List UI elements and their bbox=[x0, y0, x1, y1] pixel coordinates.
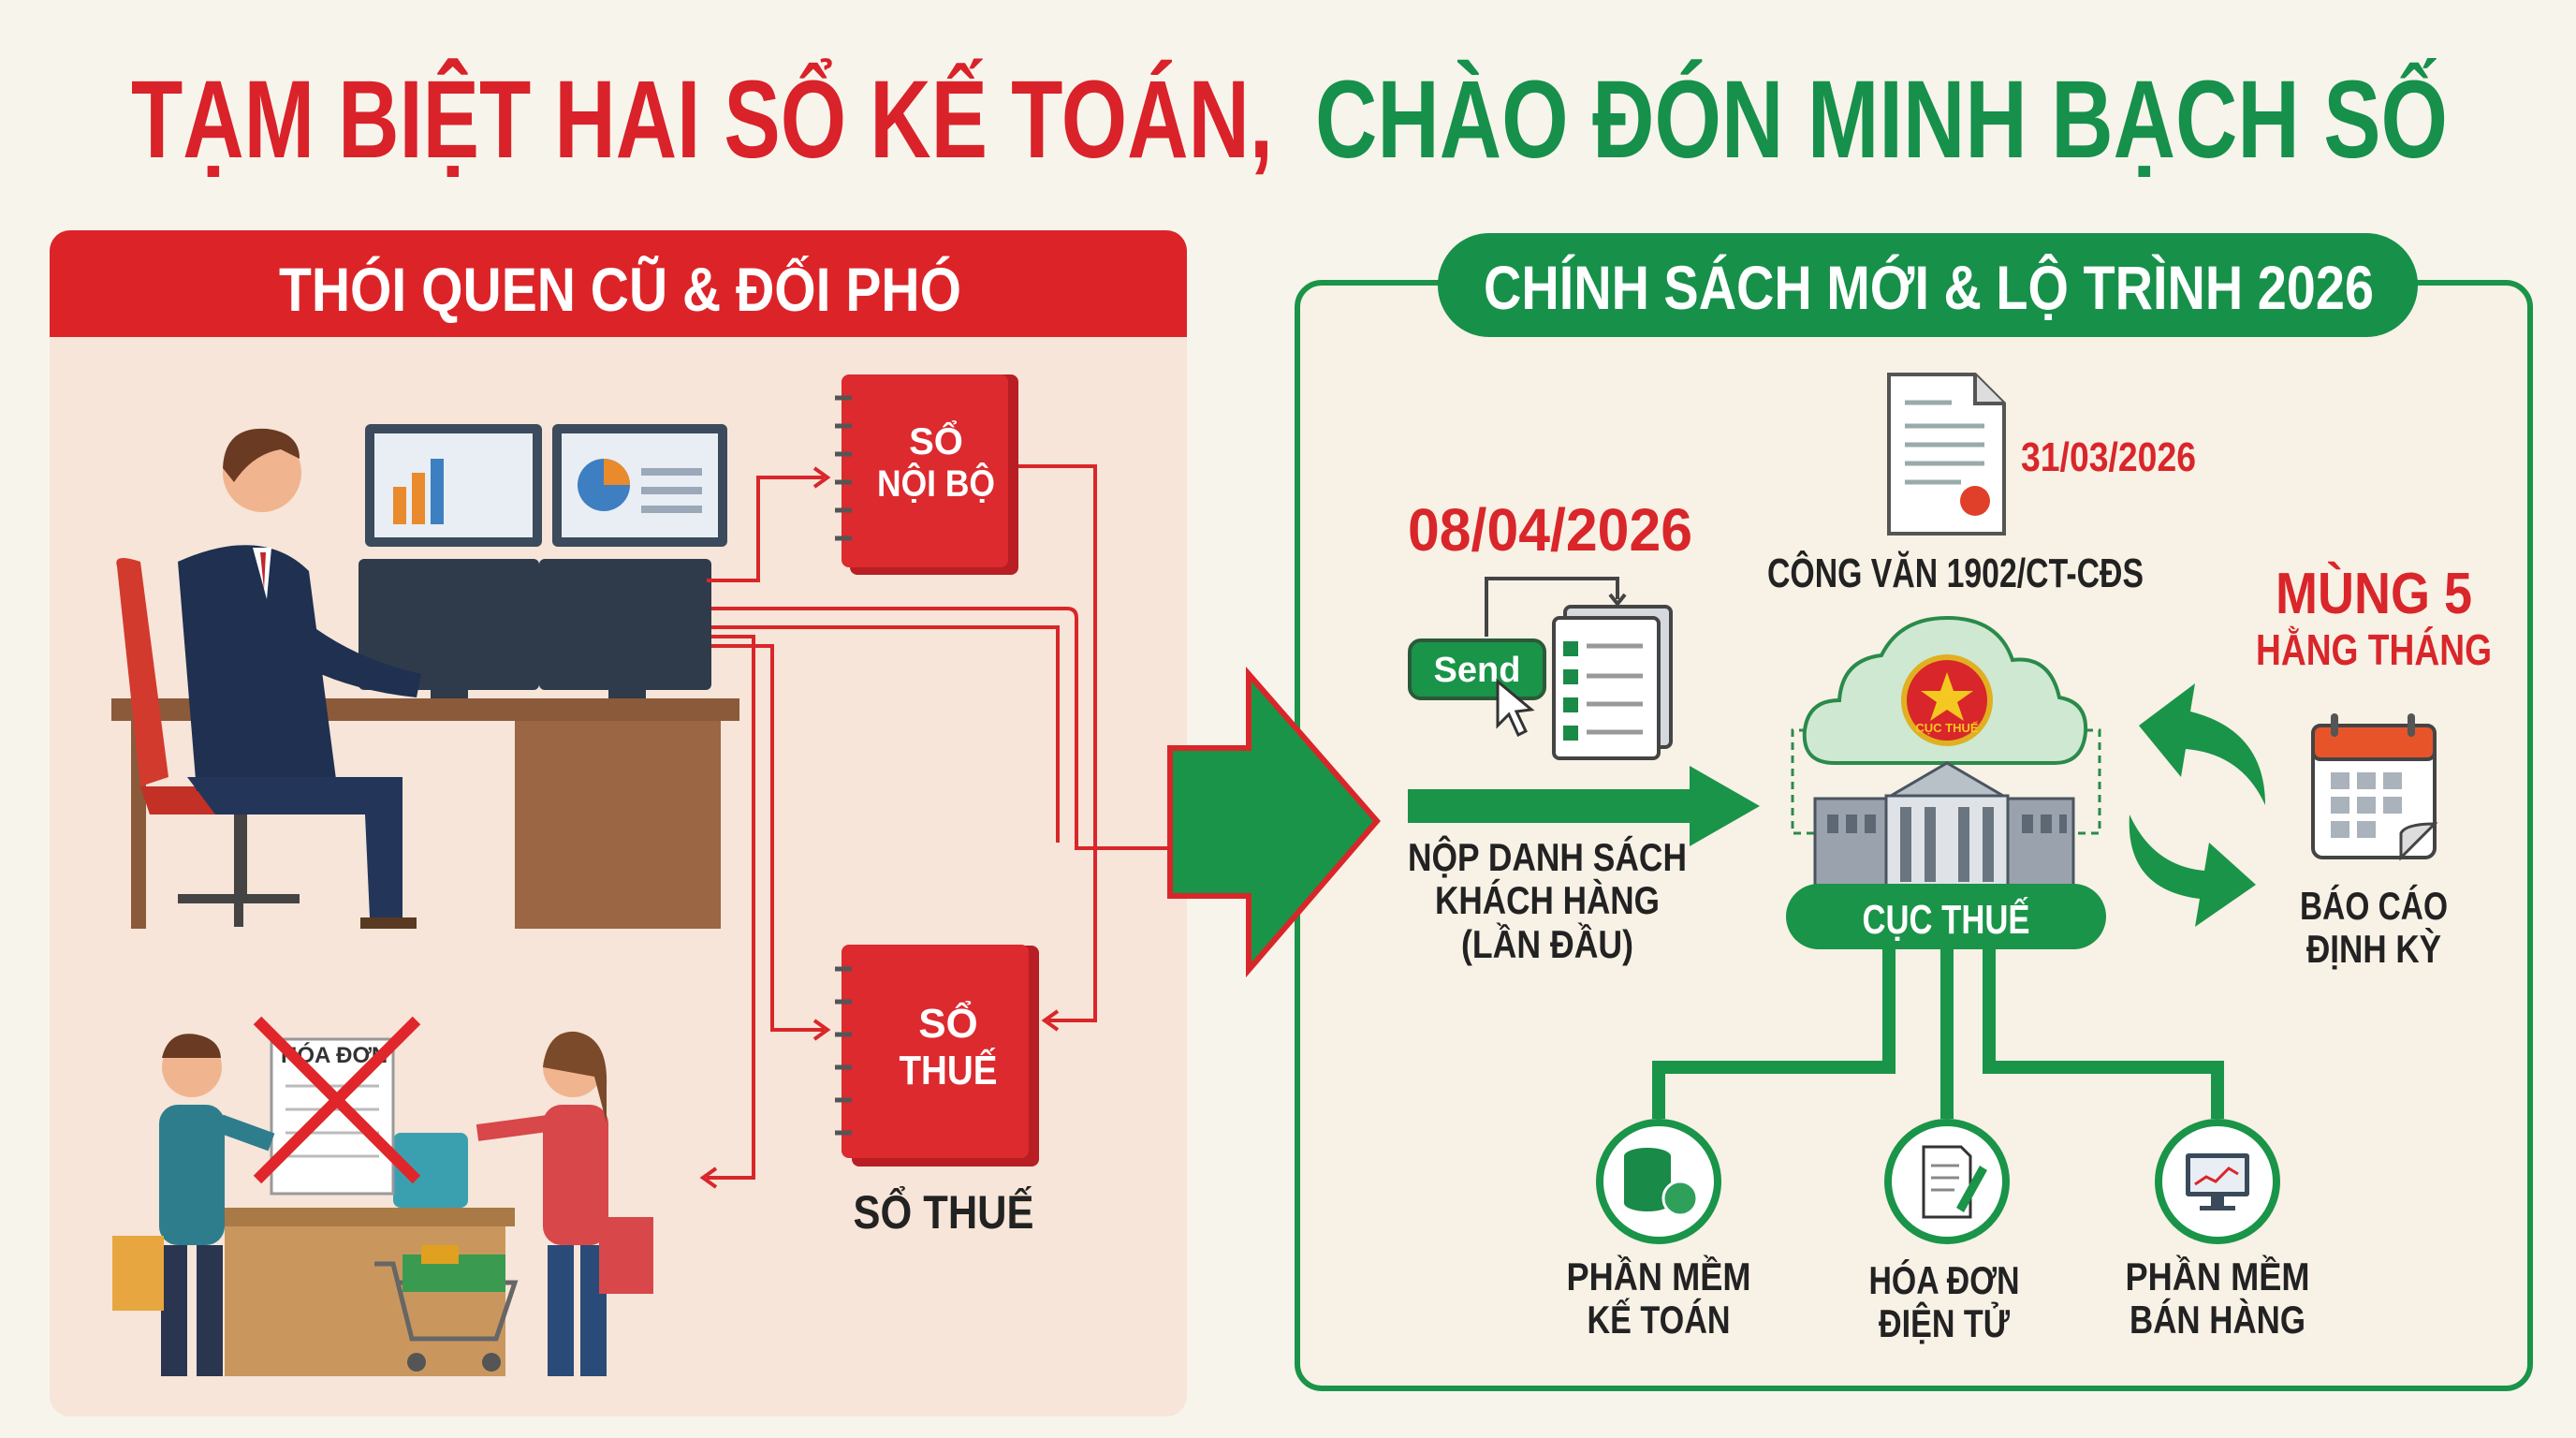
icon: official document bbox=[1889, 374, 2004, 534]
label: CỤC THUẾ pill: CỤC THUẾ bbox=[1863, 896, 2029, 943]
text: submit customer list: (LẦN ĐẦU) bbox=[1461, 922, 1633, 966]
label: SỔ THUẾ: SỔ THUẾ bbox=[854, 1185, 1033, 1239]
notebook: SỔ THUẾ: SỔ bbox=[918, 999, 978, 1047]
text: monthly deadline bbox=[2256, 562, 2492, 674]
icon: send list bbox=[1410, 579, 1671, 758]
labels: integrations: BÁN HÀNG bbox=[2130, 1298, 2305, 1342]
labels: integrations: HÓA ĐƠN bbox=[1868, 1257, 2020, 1302]
text: submit customer list bbox=[1408, 834, 1687, 966]
notebook: SỔ NỘI BỘ bbox=[835, 374, 1018, 575]
panel: old habits bbox=[50, 230, 1187, 1416]
notebook: SỔ NỘI BỘ: SỔ bbox=[909, 418, 963, 462]
text: official letter: CÔNG VĂN 1902/CT-CĐS bbox=[1767, 549, 2144, 596]
illustration: shop scene: HÓA ĐƠN bbox=[281, 1042, 388, 1068]
heading: new policy pill bbox=[1438, 233, 2418, 337]
arrow: big transition arrow bbox=[1170, 674, 1377, 970]
text: monthly deadline: MÙNG 5 bbox=[2276, 562, 2472, 626]
labels: integrations bbox=[1567, 1255, 2310, 1345]
text: monthly deadline: HẰNG THÁNG bbox=[2256, 625, 2492, 674]
notebook: SỔ THUẾ bbox=[835, 945, 1039, 1167]
heading: new policy pill: CHÍNH SÁCH MỚI & LỘ TRÌNH 2026 bbox=[1484, 253, 2374, 322]
date: 08/04/2026: 08/04/2026 bbox=[1408, 496, 1692, 564]
icon: sales software bbox=[2159, 1123, 2276, 1240]
heading: old habits: THÓI QUEN CŨ & ĐỐI PHÓ bbox=[279, 255, 961, 324]
icon: e-invoice bbox=[1888, 1123, 2006, 1240]
title: TẠM BIỆT HAI SỔ KẾ TOÁN, bbox=[131, 57, 1273, 182]
notebook: SỔ NỘI BỘ: NỘI BỘ bbox=[877, 462, 995, 505]
icon: calendar bbox=[2313, 713, 2435, 858]
labels: integrations: PHẦN MỀM bbox=[2125, 1255, 2310, 1299]
notebook: SỔ THUẾ: THUẾ bbox=[899, 1047, 998, 1093]
icon: cloud with emblem and building bbox=[1793, 618, 2100, 888]
icon: accounting software bbox=[1600, 1123, 1718, 1240]
text: submit customer list: KHÁCH HÀNG bbox=[1435, 878, 1660, 922]
date: 31/03/2026: 31/03/2026 bbox=[2021, 434, 2196, 480]
heading: old habits bbox=[50, 230, 1187, 337]
arrows: red flow lines bbox=[703, 466, 1170, 1187]
labels: integrations: PHẦN MỀM bbox=[1567, 1255, 1750, 1299]
arrows: periodic cycle bbox=[2130, 683, 2265, 927]
label: CỤC THUẾ pill bbox=[1786, 884, 2106, 949]
icon: cloud with emblem and building: CỤC THUẾ bbox=[1915, 721, 1979, 735]
text: submit customer list: NỘP DANH SÁCH bbox=[1408, 834, 1687, 879]
icon: send list: Send bbox=[1434, 651, 1520, 690]
text: periodic report: BÁO CÁO bbox=[2300, 884, 2448, 928]
connectors: tree lines bbox=[1659, 949, 2217, 1119]
labels: integrations: KẾ TOÁN bbox=[1588, 1298, 1730, 1342]
labels: integrations: ĐIỆN TỬ bbox=[1879, 1300, 2010, 1345]
text: periodic report bbox=[2300, 884, 2448, 971]
arrow: submit to tax dept bbox=[1408, 766, 1760, 846]
illustration: accountant at desk bbox=[111, 424, 739, 929]
text: periodic report: ĐỊNH KỲ bbox=[2306, 927, 2441, 971]
title bbox=[131, 57, 2448, 182]
panel: new policy bbox=[1297, 233, 2530, 1388]
illustration: shop scene bbox=[112, 1020, 653, 1376]
